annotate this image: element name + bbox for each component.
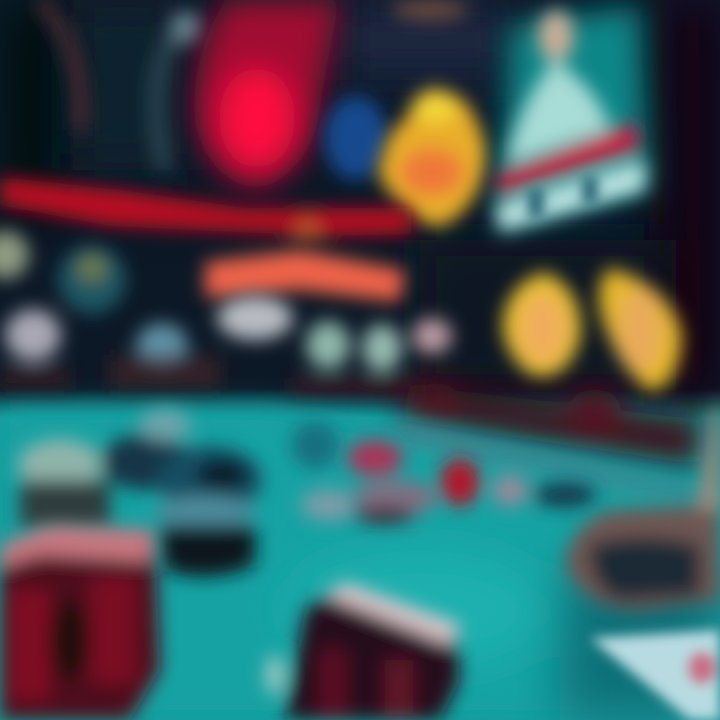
icon: playing card bottom right: [590, 630, 720, 720]
icon: blue circle: [324, 96, 388, 180]
icon: red die bottom left: [0, 525, 160, 720]
icon: decorative wall swirl: [40, 0, 468, 170]
icon: stacked poker chips: [18, 409, 360, 576]
icon: red heart shape: [194, 0, 340, 190]
icon: yellow emblem: [378, 88, 486, 226]
icon: twin yellow shapes: [503, 268, 682, 392]
icon: dark die bottom centre: [266, 582, 462, 720]
icon: red banner stripe: [0, 177, 412, 240]
icon: scattered red chips and cards: [347, 440, 597, 523]
icon: row of slot symbols: [0, 231, 452, 396]
panel: dark wall background: [0, 0, 720, 400]
panel: teal table surface: [0, 410, 720, 720]
panel: teal poster top right: [495, 5, 648, 232]
icon: orange sign: [205, 250, 405, 302]
panel: dark red machine base: [400, 382, 700, 465]
icon: hand reaching over table: [565, 400, 720, 610]
